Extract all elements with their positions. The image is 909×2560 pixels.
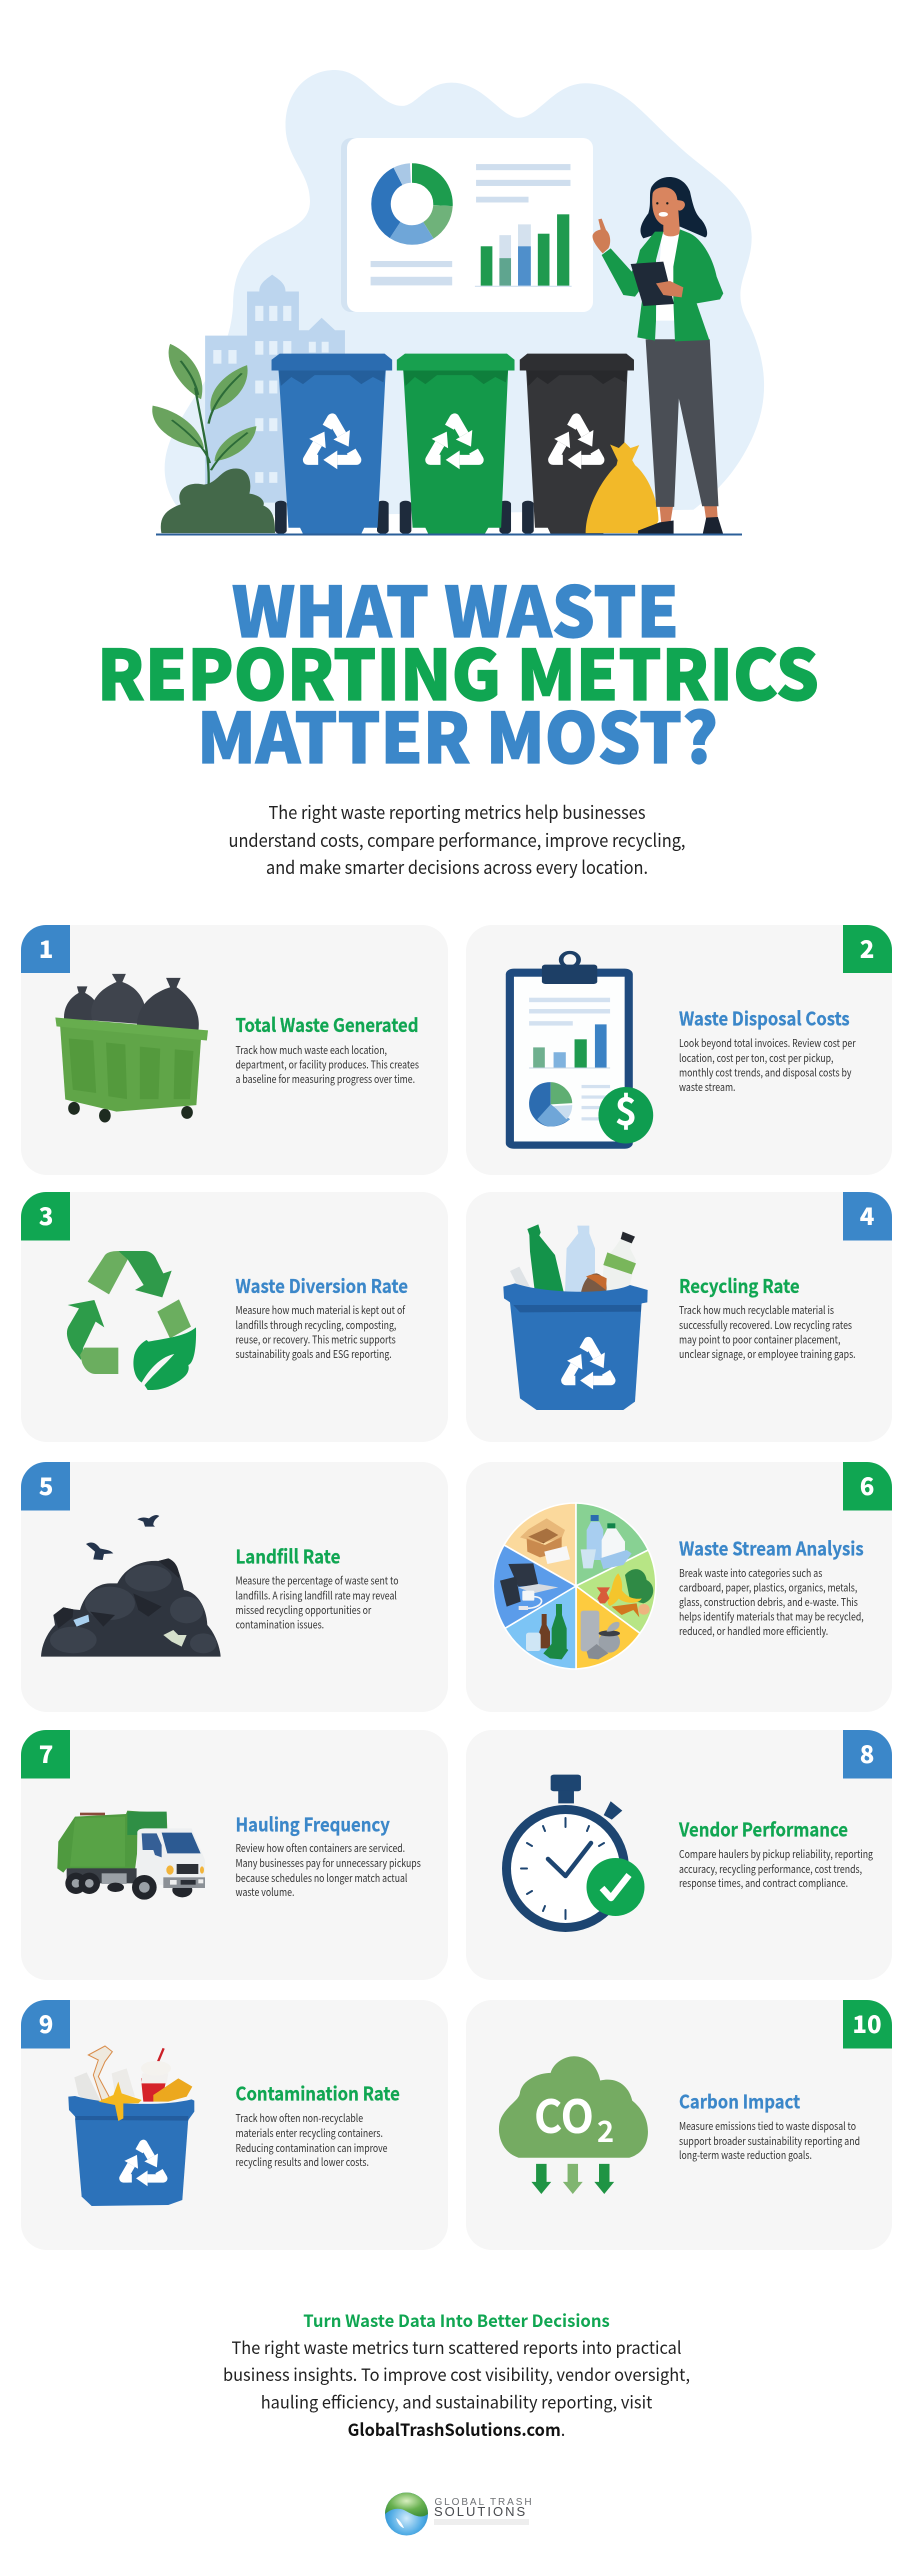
body text: support broader sustainability reporting and: [679, 2134, 860, 2149]
heading: Carbon Impact: [679, 2088, 800, 2114]
heading: Waste Diversion Rate: [236, 1272, 408, 1299]
heading: Total Waste Generated: [236, 1011, 418, 1038]
panel: total waste generated: [21, 925, 448, 1175]
dashboard board: [341, 138, 593, 312]
closing text: GlobalTrashSolutions.com.: [348, 2416, 565, 2441]
badge 4: [843, 1192, 892, 1240]
body text: [236, 2111, 388, 2170]
icon: landfill pile and birds: [41, 1515, 221, 1657]
body text: sustainability goals and ESG reporting.: [236, 1347, 392, 1362]
pie: glass: [526, 1604, 568, 1659]
panel: contamination rate: [21, 2000, 448, 2250]
body text: Measure emissions tied to waste disposal to: [679, 2119, 856, 2134]
blue bin: [272, 354, 392, 534]
badge 10: [843, 2000, 892, 2048]
closing call to action: [223, 2307, 690, 2441]
badge 7: [21, 1730, 70, 1778]
intro text: understand costs, compare performance, improve recycling,: [228, 827, 686, 853]
body text: materials enter recycling containers.: [236, 2126, 383, 2141]
body text: successfully recovered. Low recycling rates: [679, 1318, 852, 1333]
badge 3: [21, 1192, 70, 1240]
body text: because schedules no longer match actual: [236, 1871, 407, 1886]
panel: hauling frequency: [21, 1730, 448, 1980]
badge 5: 5: [39, 1467, 53, 1502]
closing text: hauling efficiency, and sustainability reporting, visit: [261, 2388, 653, 2414]
body text: Review how often containers are serviced.: [236, 1841, 405, 1856]
body text: Look beyond total invoices. Review cost per: [679, 1036, 856, 1051]
body text: missed recycling opportunities or: [236, 1603, 372, 1618]
panel: waste disposal costs: [466, 925, 892, 1175]
heading: Waste Stream Analysis: [679, 1534, 864, 1562]
body text: [236, 1303, 406, 1362]
pie: electronics: [500, 1563, 558, 1610]
green bin: [397, 354, 515, 534]
heading: Hauling Frequency: [236, 1810, 390, 1838]
badge 3: 3: [39, 1197, 53, 1232]
body text: may point to poor container placement,: [679, 1332, 840, 1348]
arrows down: [531, 2164, 614, 2194]
body text: waste volume.: [236, 1885, 294, 1900]
body text: Break waste into categories such as: [679, 1566, 822, 1581]
badge 1: [21, 925, 70, 973]
logo: Global Trash Solutions: SOLUTIONS: [434, 2504, 527, 2519]
body text: department, or facility produces. This creates: [236, 1058, 419, 1072]
body text: waste stream.: [679, 1080, 736, 1095]
badge 1: 1: [39, 930, 53, 965]
body text: helps identify materials that may be recycled,: [679, 1610, 864, 1624]
body text: cardboard, paper, plastics, organics, metals,: [679, 1580, 857, 1596]
panel: landfill rate: [21, 1462, 448, 1712]
body text: recycling results and lower costs.: [236, 2155, 369, 2170]
icon: dumpster with bags: [55, 974, 208, 1122]
plant and bush: [152, 344, 275, 533]
icon: contaminated recycling bin: [68, 2046, 194, 2206]
body text: reduced, or handled more efficiently.: [679, 1624, 828, 1639]
icon: stopwatch with check: [506, 1775, 644, 1928]
body text: Compare haulers by pickup reliability, reporting: [679, 1847, 873, 1862]
body text: [679, 1303, 856, 1362]
presenter woman: [593, 177, 723, 534]
panel: carbon impact: [466, 2000, 892, 2250]
icon: recycling bin with bottles: [503, 1224, 648, 1410]
title: WHAT WASTE: [232, 557, 679, 657]
intro text: The right waste reporting metrics help businesses: [268, 799, 646, 825]
body text: landfills. A rising landfill rate may reveal: [236, 1588, 397, 1604]
background blob: [165, 70, 764, 517]
body text: monthly cost trends, and disposal costs by: [679, 1066, 852, 1080]
city skyline: [205, 275, 373, 503]
body text: unclear signage, or employee training gaps.: [679, 1347, 856, 1362]
title: REPORTING METRICS: [97, 620, 819, 720]
closing text: business insights. To improve cost visibility, vendor oversight,: [223, 2361, 690, 2386]
donut chart: [381, 173, 443, 235]
board text lines: [371, 164, 570, 285]
body text: a baseline for measuring progress over time.: [236, 1072, 415, 1087]
body text: Track how much waste each location,: [236, 1043, 387, 1058]
icon: CO2 cloud: [499, 2056, 648, 2194]
badge 6: 6: [860, 1467, 874, 1502]
body text: [236, 1574, 398, 1632]
closing text: [223, 2334, 690, 2441]
ground line: [156, 534, 742, 536]
body text: landfills through recycling, composting,: [236, 1318, 396, 1333]
body text: [679, 1036, 856, 1095]
bar chart: [475, 214, 572, 287]
CO2 label: 2: [597, 2109, 614, 2151]
panel: waste stream analysis: [466, 1462, 892, 1712]
heading: Recycling Rate: [679, 1272, 800, 1299]
badge 7: 7: [39, 1735, 53, 1770]
heading: Landfill Rate: [236, 1542, 340, 1570]
title: [97, 557, 819, 783]
CO2 label: CO: [534, 2081, 594, 2147]
hero illustration: [152, 70, 764, 536]
black bin: [520, 354, 634, 534]
body text: Measure the percentage of waste sent to: [236, 1574, 398, 1588]
pie: metals: [581, 1611, 620, 1659]
trash bag: [586, 442, 658, 533]
closing heading: Turn Waste Data Into Better Decisions: [303, 2307, 610, 2332]
badge 2: 2: [860, 930, 874, 965]
badge 9: 9: [39, 2005, 53, 2040]
icon: dollar sign: $: [615, 1081, 637, 1136]
body text: [236, 1043, 419, 1087]
bins: [272, 354, 634, 534]
heading: Vendor Performance: [678, 1816, 848, 1842]
body text: contamination issues.: [236, 1618, 324, 1632]
body text: [679, 2119, 860, 2163]
badge 10: 10: [852, 2005, 882, 2040]
badge 5: [21, 1462, 70, 1510]
body text: response times, and contract compliance.: [679, 1876, 848, 1891]
panel: vendor performance: [466, 1730, 892, 1980]
badge 4: 4: [860, 1197, 874, 1232]
panel: recycling rate: [466, 1192, 892, 1442]
intro text: [228, 799, 686, 880]
badge 8: 8: [860, 1735, 874, 1770]
badge 2: [843, 925, 892, 973]
icon: clipboard report: [506, 952, 653, 1149]
pie: cardboard and paper: [520, 1518, 570, 1564]
body text: long-term waste reduction goals.: [679, 2148, 812, 2163]
panel: waste diversion rate: [21, 1192, 448, 1442]
body text: [679, 1566, 864, 1639]
body text: glass, construction debris, and e-waste. This: [679, 1595, 858, 1610]
body text: Measure how much material is kept out of: [236, 1303, 406, 1318]
pie: plastics: [581, 1515, 632, 1569]
logo: Global Trash Solutions: [385, 2492, 533, 2536]
body text: Many businesses pay for unnecessary pickups: [236, 1856, 421, 1871]
closing text: The right waste metrics turn scattered reports into practical: [232, 2334, 682, 2359]
intro text: and make smarter decisions across every location.: [266, 854, 648, 880]
body text: [236, 1841, 421, 1900]
icon: garbage truck: [57, 1811, 205, 1900]
badge 6: [843, 1462, 892, 1510]
heading: Contamination Rate: [236, 2080, 400, 2106]
body text: accuracy, recycling performance, cost trends,: [679, 1862, 862, 1877]
body text: Track how much recyclable material is: [679, 1303, 834, 1318]
body text: Track how often non-recyclable: [236, 2111, 363, 2126]
title: MATTER MOST?: [197, 683, 718, 783]
body text: [679, 1847, 873, 1891]
heading: Waste Disposal Costs: [679, 1004, 850, 1032]
body text: reuse, or recovery. This metric supports: [236, 1332, 396, 1348]
pie chart: waste categories: [493, 1503, 656, 1669]
icon: recycling arrows with leaf: [67, 1251, 196, 1394]
pie: organics: [597, 1569, 653, 1617]
body text: location, cost per ton, cost per pickup,: [679, 1051, 833, 1066]
logo: Global Trash Solutions: GLOBAL TRASH: [434, 2497, 533, 2508]
badge 8: [843, 1730, 892, 1778]
body text: Reducing contamination can improve: [236, 2141, 388, 2156]
badge 9: [21, 2000, 70, 2048]
legs: [638, 339, 723, 534]
